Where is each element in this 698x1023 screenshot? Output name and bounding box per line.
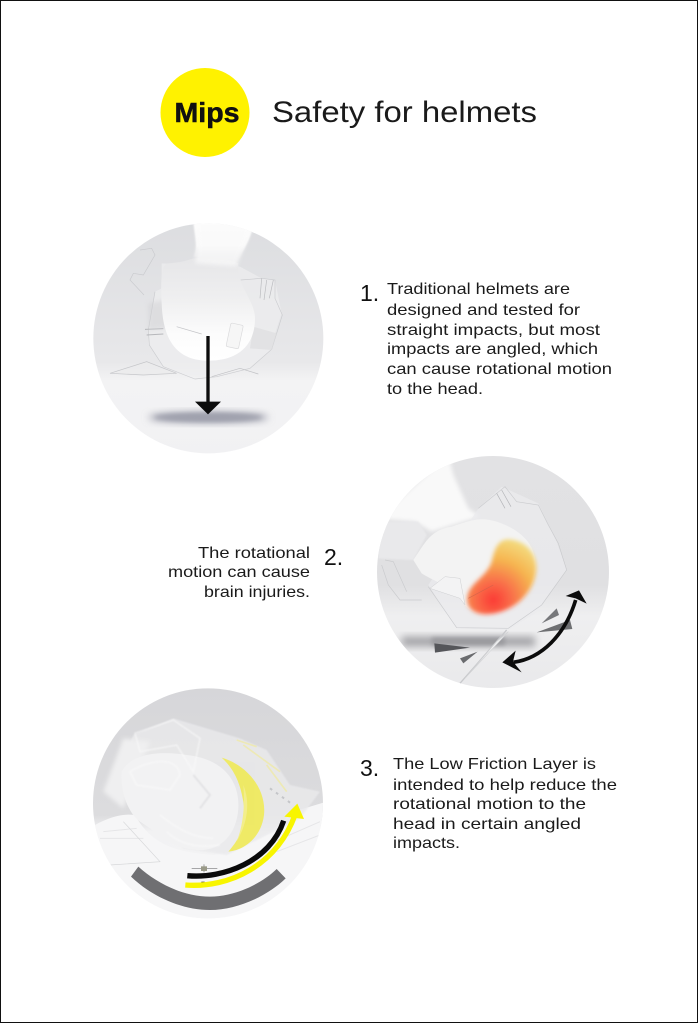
floor blurred texture — [113, 394, 300, 410]
helmet outline — [382, 487, 567, 683]
text: step 3 number: 3. — [360, 755, 379, 781]
panel: straight impact illustration — [90, 220, 327, 457]
floor shadow — [402, 637, 535, 646]
head — [126, 754, 238, 826]
text: step 1 description: can cause rotational motion — [387, 361, 612, 378]
motion wedges — [434, 608, 572, 663]
logo: Mips yellow circle: Mips — [174, 97, 240, 128]
text: step 1 number: 1. — [360, 280, 379, 306]
title: Safety for helmets — [272, 96, 537, 129]
text: step 3 description: The Low Friction Layer is — [393, 756, 596, 773]
grey curved impact surface — [131, 867, 286, 910]
text: step 1 description: impacts are angled, which — [387, 341, 598, 358]
head — [162, 296, 255, 360]
panel: rotational motion illustration — [375, 455, 612, 692]
text: step 1 description: designed and tested for — [387, 302, 581, 319]
text: step 1 description: straight impacts, but most — [387, 322, 601, 339]
panel: low friction layer illustration — [90, 685, 327, 922]
text: step 1 description: Traditional helmets are — [387, 281, 570, 298]
text: step 3 description: rotational motion to the — [393, 796, 586, 813]
helmet shell — [117, 718, 320, 855]
text: step 2 description: motion can cause — [168, 564, 310, 581]
floor surface — [96, 802, 323, 828]
text: step 1 description — [387, 281, 612, 398]
helmet outline — [110, 248, 282, 379]
text: step 3 description — [393, 756, 617, 852]
text: step 3 description: intended to help reduce the — [393, 777, 617, 794]
logo: Mips yellow circle — [160, 68, 250, 157]
text: step 2 number: 2. — [324, 544, 343, 570]
text: step 2 description: The rotational — [198, 545, 310, 562]
arrow: black reduced rotation arc — [187, 821, 284, 876]
text: step 2 description: brain injuries. — [204, 584, 310, 601]
text: step 3 description: head in certain angled — [393, 816, 581, 833]
yellow low friction layer — [222, 740, 287, 852]
arrow: straight downward impact — [195, 336, 221, 414]
text: step 3 description: impacts. — [393, 835, 460, 852]
heat map — [467, 539, 536, 614]
arrow: curved double-headed rotation — [502, 590, 587, 672]
neck — [194, 224, 252, 253]
arrow: yellow rotation arrow — [185, 804, 304, 885]
impact shadow — [148, 412, 268, 422]
text: step 2 description — [168, 545, 310, 601]
text: step 1 description: to the head. — [387, 381, 483, 398]
neck highlight — [390, 464, 476, 532]
head — [414, 520, 532, 598]
small sensor marks — [192, 864, 217, 872]
